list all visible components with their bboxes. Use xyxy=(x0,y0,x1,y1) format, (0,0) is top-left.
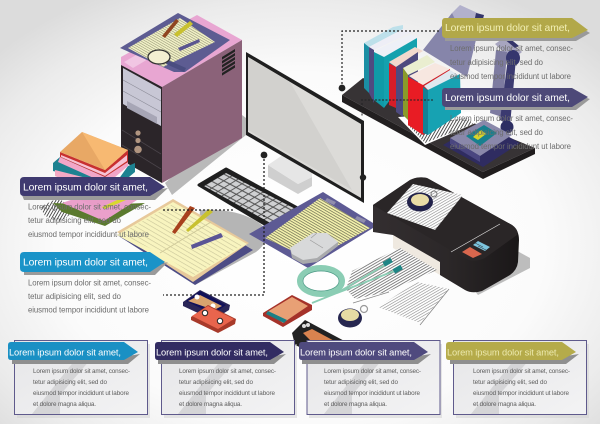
dotted connector: shelf xyxy=(342,31,440,88)
media player xyxy=(263,295,312,327)
printer xyxy=(373,177,530,295)
body text: left 1: Lorem ipsum dolor sit amet, consec- xyxy=(28,202,151,212)
callout: top right olive xyxy=(442,18,590,41)
callout: left blue xyxy=(20,252,168,275)
body text: bottom 1: Lorem ipsum dolor sit amet, consec- xyxy=(33,368,130,375)
banner: bottom 4: Lorem ipsum dolor sit amet, xyxy=(447,348,559,358)
lower books xyxy=(40,180,145,226)
network cable xyxy=(300,258,403,303)
body text: left 1: eiusmod tempor incididunt ut labore xyxy=(28,230,149,239)
body text: bottom 4: et dolore magna aliqua. xyxy=(473,401,536,408)
connector: shelf to banner xyxy=(361,100,433,116)
body text: bottom 3: Lorem ipsum dolor sit amet, consec- xyxy=(324,368,421,375)
computer mouse xyxy=(290,233,338,264)
shelf books xyxy=(364,25,478,145)
connector: book to clipboard xyxy=(163,209,233,211)
cassette: navy xyxy=(183,290,230,320)
body text: top right 1: Lorem ipsum dolor sit amet, consec- xyxy=(450,44,573,53)
body text: bottom 2: et dolore magna aliqua. xyxy=(179,401,242,408)
body text: bottom 4: Lorem ipsum dolor sit amet, consec- xyxy=(473,368,570,375)
body text: top right 2: Lorem ipsum dolor sit amet, consec- xyxy=(450,114,573,123)
dotted connector: keyboard to cassettes xyxy=(163,155,264,295)
body text: bottom 3: tetur adipisicing elit, sed do xyxy=(324,379,398,386)
monitor stand xyxy=(268,150,312,194)
banner: bottom 1 xyxy=(8,342,140,364)
callout: left blue: Lorem ipsum dolor sit amet, xyxy=(23,258,148,268)
body text: left 2: eiusmod tempor incididunt ut labore xyxy=(28,306,149,314)
connector node: shelf xyxy=(339,85,345,91)
body text: bottom 4: tetur adipisicing elit, sed do xyxy=(473,379,547,386)
body text: bottom 2: tetur adipisicing elit, sed do xyxy=(179,379,253,386)
stack of books xyxy=(40,132,145,226)
keyboard xyxy=(199,169,312,235)
panel: bottom 4 xyxy=(446,340,589,418)
open book xyxy=(117,199,266,285)
callout: top right purple xyxy=(442,88,590,110)
body text: left 2 xyxy=(28,278,151,314)
body text: bottom 1: eiusmod tempor incididunt ut labore xyxy=(33,390,129,397)
clipboard on tower xyxy=(120,13,230,72)
body text: bottom 3: eiusmod tempor incididunt ut labore xyxy=(324,390,420,397)
callout: left purple: Lorem ipsum dolor sit amet, xyxy=(23,182,148,194)
monitor xyxy=(246,52,366,203)
banner: bottom 3 xyxy=(299,342,431,364)
connector node: keyboard xyxy=(261,152,267,158)
magnifying glass xyxy=(148,50,186,72)
paper on printer xyxy=(387,184,463,230)
banner: bottom 2: Lorem ipsum dolor sit amet, xyxy=(156,348,268,358)
callout: top right olive: Lorem ipsum dolor sit amet, xyxy=(445,23,570,34)
panel: bottom 1 xyxy=(8,340,150,418)
stopwatch on printer xyxy=(407,191,437,212)
stopwatch xyxy=(338,306,368,328)
shelf xyxy=(342,78,535,179)
body text: bottom 2: eiusmod tempor incididunt ut labore xyxy=(179,390,275,397)
body text: left 1: tetur adipisicing elit, sed do xyxy=(28,216,122,225)
body text: bottom 1 xyxy=(33,368,130,408)
banner: bottom 2 xyxy=(155,342,286,364)
body text: bottom 2 xyxy=(179,368,276,408)
body text: top right 2: eiusmod tempor incididunt ut labore xyxy=(450,142,571,151)
cassette: red xyxy=(191,305,236,333)
body text: bottom 1: tetur adipisicing elit, sed do xyxy=(33,379,107,386)
body text: bottom 2: Lorem ipsum dolor sit amet, consec- xyxy=(179,368,276,375)
lamp base xyxy=(443,120,520,167)
panel: bottom 2 xyxy=(155,340,297,418)
body text: top right 1: tetur adipisicing elit, sed do xyxy=(450,58,544,67)
body text: bottom 1: et dolore magna aliqua. xyxy=(33,401,96,408)
body text: top right 2: tetur adipisicing elit, sed do xyxy=(450,128,544,137)
computer tower xyxy=(120,13,246,195)
body text: bottom 3: et dolore magna aliqua. xyxy=(324,401,387,408)
printed papers xyxy=(346,248,449,325)
banner: bottom 4 xyxy=(446,342,579,364)
callout: left purple xyxy=(20,177,168,200)
banner: bottom 3: Lorem ipsum dolor sit amet, xyxy=(300,348,412,358)
body text: bottom 4: eiusmod tempor incididunt ut labore xyxy=(473,390,569,397)
smartphone xyxy=(292,320,350,356)
body text: bottom 4 xyxy=(473,368,570,408)
body text: left 2: Lorem ipsum dolor sit amet, consec- xyxy=(28,278,151,288)
panel: bottom 3 xyxy=(299,340,442,418)
body text: left 2: tetur adipisicing elit, sed do xyxy=(28,292,122,301)
body text: left 1 xyxy=(28,202,151,239)
banner: bottom 1: Lorem ipsum dolor sit amet, xyxy=(9,348,121,358)
clipboard with mouse xyxy=(249,192,373,268)
body text: top right 1: eiusmod tempor incididunt ut labore xyxy=(450,72,571,81)
desk lamp xyxy=(423,5,522,167)
body text: top right 1 xyxy=(450,44,573,81)
callout: top right purple: Lorem ipsum dolor sit amet, xyxy=(445,93,570,104)
body text: bottom 3 xyxy=(324,368,421,408)
body text: top right 2 xyxy=(450,114,573,151)
